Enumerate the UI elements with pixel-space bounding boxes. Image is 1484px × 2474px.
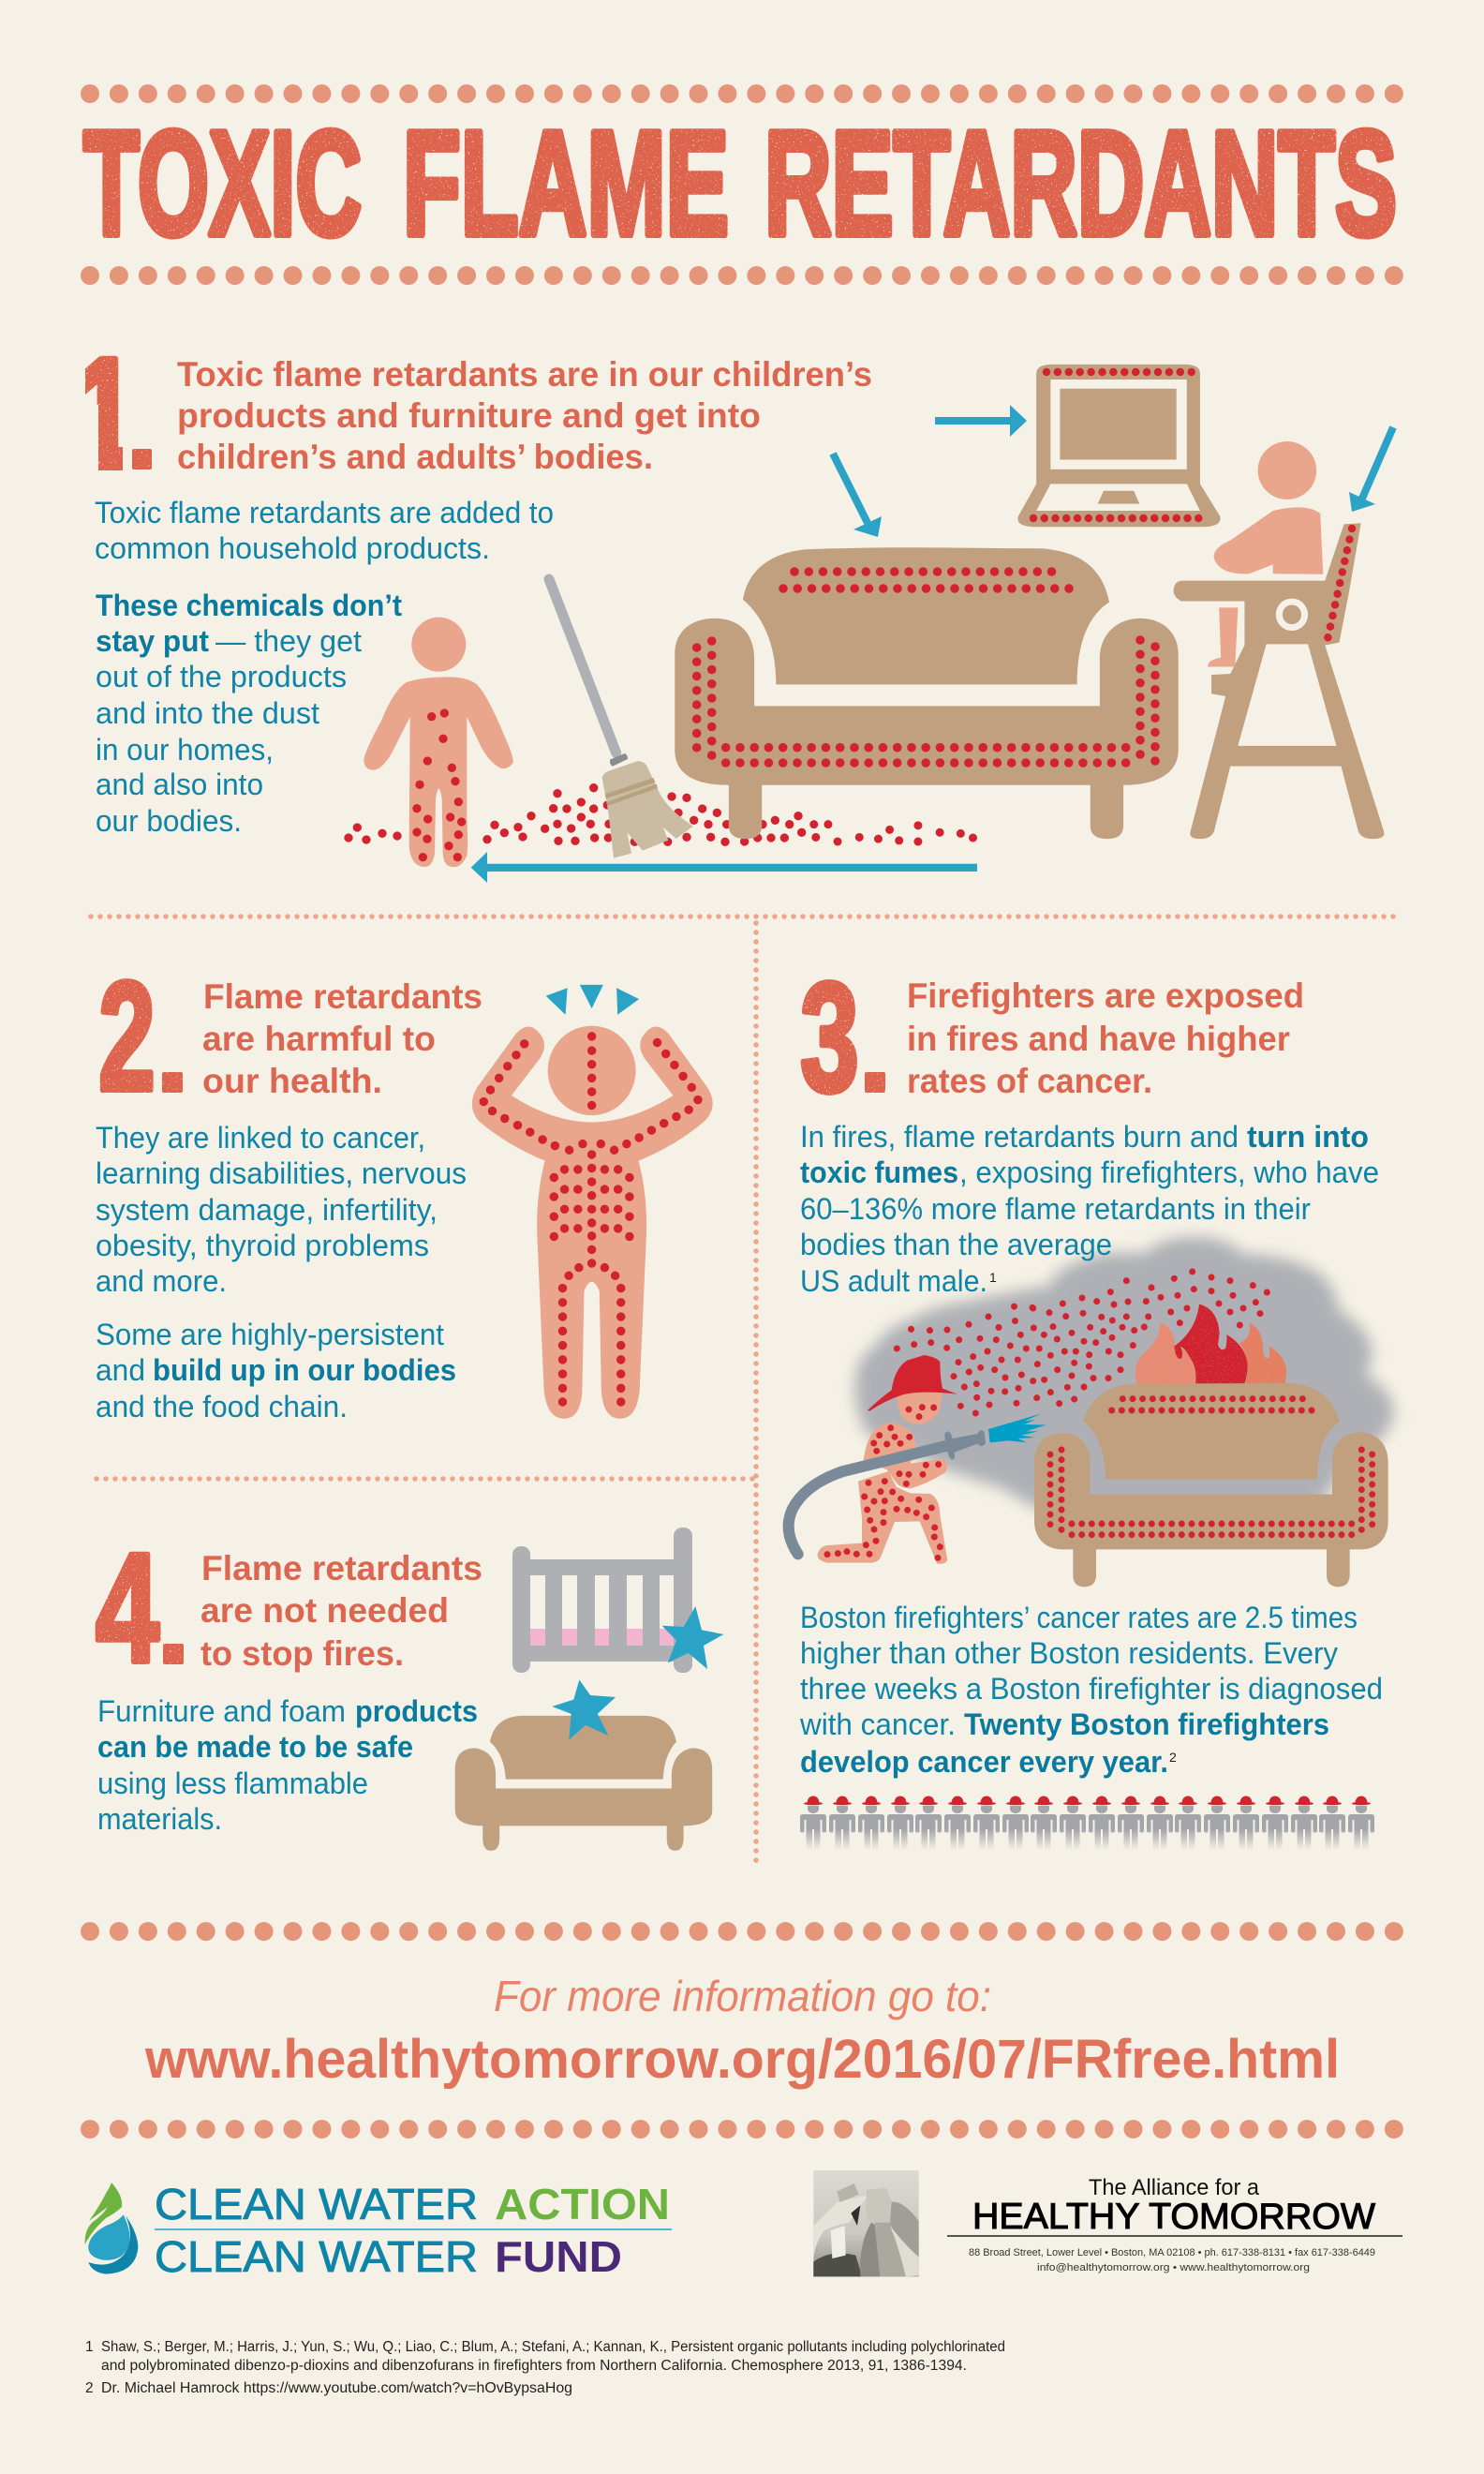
section 1 body text: and also into [96,768,263,801]
fire spray of chemical dots [897,1272,1267,1413]
section 3 text top: US adult male. [800,1264,987,1298]
section 4 body text: products [355,1694,478,1728]
icon: burning sofa [1034,1383,1388,1587]
icon: baby in high chair [1174,441,1384,839]
logo: Clean Water Action: CLEAN WATER [155,2232,478,2281]
section 1 heading: products and furniture and get into [177,396,761,435]
icon: laptop [1017,365,1221,527]
footnotes: 2 [85,2380,94,2396]
icon: sofa with dots [675,547,1179,839]
lower dotted rule [90,2120,1396,2139]
section 3 heading: rates of cancer. [907,1062,1152,1100]
section 2 heading: our health. [202,1062,382,1100]
section 1 heading [177,355,872,476]
arrow: to high chair [1349,427,1393,512]
call to action: For more information go to: [494,1972,991,2020]
section 2 number: 2 [98,950,156,1124]
section 3 number: 3 [800,951,859,1125]
section 3 text bottom: 2 [1169,1750,1177,1765]
footnotes: 1 [85,2339,94,2355]
section 3 heading [907,976,1304,1100]
section 3 text top: , exposing firefighters, who have [959,1155,1379,1189]
smoke cloud [854,1237,1394,1518]
arrow: along floor to child [471,852,977,883]
section 4 heading: are not needed [200,1591,449,1630]
section 3 text top: 1 [989,1270,997,1285]
section 3 text bottom: higher than other Boston residents. Every [800,1636,1338,1670]
section 1 heading: Toxic flame retardants are in our children’s [177,355,872,394]
section 3 text bottom: three weeks a Boston firefighter is diagnosed [800,1672,1383,1706]
section 1 intro text: Toxic flame retardants are added to [95,496,554,529]
logo: Alliance for a Healthy Tomorrow: 88 Broad Street, Lower Level • Boston, MA 02108 • ph. 617-338-8131 • fax 617-338-6449 [969,2247,1375,2258]
section 3 text bottom: Twenty Boston firefighters [964,1707,1329,1741]
section 1 body text: our bodies. [96,804,242,838]
section 2 body text [96,1121,467,1423]
section 3 text bottom: develop cancer every year. [800,1745,1168,1779]
section 2 heading [202,977,482,1100]
section 4 body text: using less flammable [97,1766,368,1800]
second dotted rule [90,266,1396,285]
title: FLAME [403,101,729,266]
photo: raised hands [813,2170,919,2276]
section 4 heading: to stop fires. [200,1634,404,1673]
section 1 body text: stay put [96,624,209,658]
section 2 body text: build up in our bodies [153,1353,456,1387]
arrow: to laptop [935,405,1027,437]
section 1 number: 1 [73,327,137,500]
section 1 intro text [95,496,554,565]
section 1 body text [96,589,402,838]
section 2 body text: and more. [96,1264,227,1298]
section 3 text top: In fires, flame retardants burn and [800,1120,1239,1154]
section 2 body text: Some are highly-persistent [96,1318,444,1351]
section 3 text top: toxic fumes [800,1155,958,1189]
logo: Alliance for a Healthy Tomorrow: The Alliance for a [1089,2175,1260,2200]
section 4 heading: Flame retardants [201,1549,482,1587]
title: TOXIC [83,101,362,266]
logo: Clean Water Action: ACTION [495,2180,670,2228]
icon: crib with star [512,1528,723,1673]
icon: sofa with star [455,1679,712,1851]
section 3 text top [800,1120,1379,1298]
logo: Alliance for a Healthy Tomorrow: info@healthytomorrow.org • www.healthytomorrow.org [1037,2262,1310,2273]
alarm triangles [546,985,639,1015]
vertical divider [753,923,759,1867]
section 2 body text: system damage, infertility, [96,1193,438,1227]
footnotes: and polybrominated dibenzo-p-dioxins and dibenzofurans in firefighters from Northern California. Chemosphere 2013, 91, 1386-1394. [101,2358,967,2374]
icon: broom [549,579,693,858]
section 3 text top: turn into [1247,1120,1369,1154]
section 3 heading: in fires and have higher [907,1020,1290,1058]
lower dotted rule [90,1922,1396,1941]
section 3 text bottom: with cancer. [799,1707,956,1741]
section 4 body text: can be made to be safe [97,1730,413,1764]
section 3 text bottom: Boston firefighters’ cancer rates are 2.5 times [800,1601,1358,1634]
icon: flames [1135,1304,1286,1384]
section 1 number [85,356,152,470]
logo: Alliance for a Healthy Tomorrow [947,2175,1402,2273]
section 2 body text: and [96,1353,145,1387]
row of twenty firefighters [800,1796,1374,1850]
section 3 text top: bodies than the average [800,1228,1112,1261]
section 1 heading: children’s and adults’ bodies. [177,438,653,476]
section 2 body text: and the food chain. [96,1390,348,1423]
section 4 number: 4 [96,1522,159,1695]
logo: Alliance for a Healthy Tomorrow: HEALTHY TOMORROW [972,2197,1375,2237]
divider [96,1476,754,1482]
logo: Clean Water Action: FUND [495,2232,622,2281]
arrow: to sofa [833,454,882,537]
section 4 body text: Furniture and foam [97,1694,346,1728]
icon: person with chemicals throughout body [472,985,713,1419]
dust dots on floor [349,788,972,842]
section 1 body text: out of the products [96,660,347,693]
footnotes [85,2339,1005,2396]
logo: Clean Water Action: CLEAN WATER [155,2180,478,2228]
section 4 body text [97,1694,478,1836]
section 2 body text: They are linked to cancer, [96,1121,425,1155]
section 3 text bottom [799,1601,1383,1779]
section 1 body text: and into the dust [96,696,319,730]
section 1 body text: These chemicals don’t [96,589,402,622]
footnotes: Dr. Michael Hamrock https://www.youtube.com/watch?v=hOvBypsaHog [101,2380,572,2396]
website url: www.healthytomorrow.org/2016/07/FRfree.html [144,2029,1340,2090]
divider [91,914,1396,919]
section 4 body text: materials. [97,1802,222,1836]
section 1 body text: — they get [215,624,362,658]
section 1 body text: in our homes, [96,733,274,767]
section 2 heading: are harmful to [202,1020,436,1058]
top dotted rule [90,84,1396,103]
title [83,101,1397,266]
icon: firefighter with hose [789,1355,1046,1564]
section 2 heading: Flame retardants [203,977,482,1016]
section 1 intro text: common household products. [95,531,490,565]
section 3 heading: Firefighters are exposed [907,976,1304,1015]
section 3 text top: 60–136% more flame retardants in their [800,1192,1311,1226]
logo: Clean Water Action [85,2180,672,2281]
section 2 body text: obesity, thyroid problems [96,1229,429,1262]
section 2 body text: learning disabilities, nervous [96,1156,467,1190]
section 4 heading [200,1549,482,1673]
icon: child with dots in body [364,618,513,867]
footnotes: Shaw, S.; Berger, M.; Harris, J.; Yun, S.; Wu, Q.; Liao, C.; Blum, A.; Stefani, A.; Kannan, K., Persistent organic pollutants including polychlorinated [101,2339,1005,2355]
